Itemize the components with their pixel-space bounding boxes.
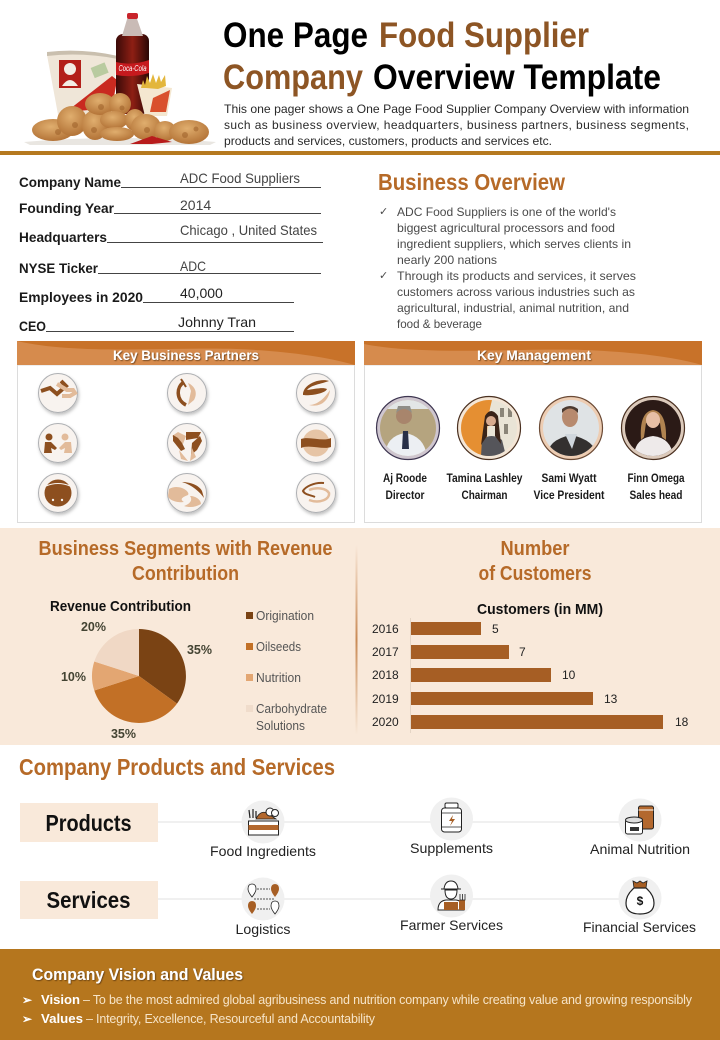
panel: company vision and values: [0, 949, 720, 1040]
company facts: 2014: [180, 197, 211, 213]
management names: Director: [386, 488, 425, 502]
bar chart: customers: 5: [492, 622, 499, 636]
bar chart: customers: 2017: [372, 645, 399, 659]
pie chart: revenue contribution: 20%: [81, 620, 106, 634]
management names: Sami Wyatt: [542, 471, 596, 485]
business overview bullets: customers across various industries such as: [397, 285, 635, 299]
panel: segments and customers band: [0, 528, 720, 745]
partner logos: [38, 374, 336, 512]
business overview bullets: ingredient suppliers, which serves clients in: [397, 237, 631, 251]
title: Food Supplier: [379, 16, 589, 55]
pie legend: Oilseeds: [256, 640, 301, 654]
business overview bullets: ✓: [379, 205, 388, 218]
pie legend: [246, 609, 327, 733]
portrait: Tamina Lashley: [458, 396, 520, 460]
image: fried chicken bucket, cola and fries: Coca-Cola: [118, 64, 147, 73]
company facts: Headquarters: [19, 229, 107, 245]
icon: financial: [618, 876, 662, 920]
values line: – Integrity, Excellence, Resourceful and Accountability: [86, 1012, 376, 1026]
management header: Key Management: [477, 347, 591, 363]
pie chart: revenue contribution: Revenue Contribution: [50, 598, 191, 615]
icon: financial: $: [637, 894, 644, 908]
business overview bullets: nearly 200 nations: [397, 253, 497, 267]
title: Overview Template: [373, 58, 661, 97]
business overview bullets: [379, 205, 636, 331]
product and service labels: Farmer Services: [400, 917, 503, 933]
company facts: ADC Food Suppliers: [180, 170, 300, 186]
pie chart: revenue contribution: 35%: [111, 727, 136, 741]
product and service labels: Animal Nutrition: [590, 841, 690, 857]
company facts: NYSE Ticker: [19, 260, 99, 276]
bar chart: customers: 10: [562, 668, 576, 682]
pie legend: Solutions: [256, 719, 305, 733]
icon: logistics: [242, 878, 284, 920]
connector lines: [158, 822, 640, 899]
product and service labels: [210, 840, 696, 937]
product and service labels: Financial Services: [583, 919, 696, 935]
management names: Chairman: [462, 488, 508, 502]
company facts: Company Name: [19, 174, 121, 190]
business overview bullets: food & beverage: [397, 317, 482, 331]
bar chart: customers: 13: [604, 692, 618, 706]
management header: [364, 341, 702, 365]
title: One Page: [223, 16, 368, 55]
label: products: [20, 803, 158, 842]
portrait: Aj Roode: [376, 396, 440, 460]
label: services: [20, 881, 158, 919]
company facts: Chicago , United States: [180, 222, 317, 238]
pie legend: Origination: [256, 609, 314, 623]
company facts: Johnny Tran: [178, 314, 256, 330]
heading: business segments: Contribution: [132, 563, 239, 585]
company facts: Employees in 2020: [19, 289, 143, 305]
pie chart: revenue contribution: 10%: [61, 670, 86, 684]
business overview bullets: ✓: [379, 269, 388, 282]
icon: farmer: [430, 874, 473, 918]
bar chart: customers: 2016: [372, 622, 399, 636]
values line: Values: [41, 1012, 83, 1026]
pie legend: Carbohydrate: [256, 702, 327, 716]
title: [223, 16, 661, 97]
intro text: such as business overview, headquarters, business partners, business segments,: [224, 118, 689, 132]
company facts: CEO: [19, 318, 46, 334]
pie chart: revenue contribution: [50, 598, 212, 741]
intro text: [224, 102, 689, 148]
product and service labels: Supplements: [410, 840, 493, 856]
partners header: Key Business Partners: [113, 347, 259, 363]
heading: number of customers: Number: [500, 538, 570, 560]
company facts: ADC: [180, 258, 206, 274]
management names: Vice President: [534, 488, 604, 502]
vision line: – To be the most admired global agribusiness and nutrition company while creating value and growing responsibly: [83, 993, 693, 1007]
heading: business segments: [38, 538, 332, 585]
icon: animal nutrition: [618, 798, 662, 842]
heading: number of customers: of Customers: [478, 563, 592, 585]
bar chart: customers: 7: [519, 645, 526, 659]
management names: Sales head: [630, 488, 682, 502]
company facts: [19, 170, 323, 334]
business overview bullets: ADC Food Suppliers is one of the world's: [397, 205, 616, 219]
business overview bullets: agricultural, industrial, animal nutrition, and: [397, 301, 629, 315]
heading: business overview: Business Overview: [378, 169, 565, 195]
icon: food ingredients: [242, 800, 284, 844]
pie chart: revenue contribution: 35%: [187, 643, 212, 657]
business overview bullets: biggest agricultural processors and food: [397, 221, 615, 235]
panel: company vision and values: Company Vision and Values: [32, 965, 243, 984]
label: services: Services: [46, 887, 130, 913]
heading: number of customers: [478, 538, 592, 585]
management names: Finn Omega: [628, 471, 685, 485]
product and service labels: Food Ingredients: [210, 843, 316, 859]
icon: supplements: [430, 798, 473, 840]
vision line: Vision: [41, 993, 80, 1007]
bar chart: customers: 2018: [372, 668, 399, 682]
header rule: [0, 151, 720, 155]
label: products: Products: [46, 810, 132, 836]
panel: key business partners: [17, 341, 355, 522]
bar chart: customers: [372, 601, 689, 733]
values line: ➢: [22, 1012, 33, 1026]
bar chart: customers: 2020: [372, 715, 399, 729]
company facts: 40,000: [180, 285, 223, 301]
bar chart: customers: 2019: [372, 692, 399, 706]
image: fried chicken bucket, cola and fries: [24, 13, 216, 145]
bar chart: customers: Customers (in MM): [477, 601, 603, 618]
pie legend: Nutrition: [256, 671, 301, 685]
management names: [383, 471, 685, 502]
company facts: Founding Year: [19, 200, 115, 216]
intro text: products and services, customers, products and services etc.: [224, 134, 552, 148]
management names: Aj Roode: [383, 471, 427, 485]
portrait: Finn Omega: [622, 396, 684, 460]
heading: company products and services: Company Products and Services: [19, 754, 335, 780]
management names: Tamina Lashley: [446, 471, 523, 485]
intro text: This one pager shows a One Page Food Supplier Company Overview with information: [224, 102, 689, 116]
title: Company: [223, 58, 363, 97]
portrait: Sami Wyatt: [540, 396, 602, 460]
heading: business segments: Business Segments with Revenue: [38, 538, 332, 560]
panel: key management: [364, 341, 702, 522]
business overview bullets: Through its products and services, it serves: [397, 269, 636, 283]
product and service labels: Logistics: [236, 921, 290, 937]
partners header: [17, 341, 355, 365]
bar chart: customers: 18: [675, 715, 689, 729]
vision line: ➢: [22, 993, 33, 1007]
